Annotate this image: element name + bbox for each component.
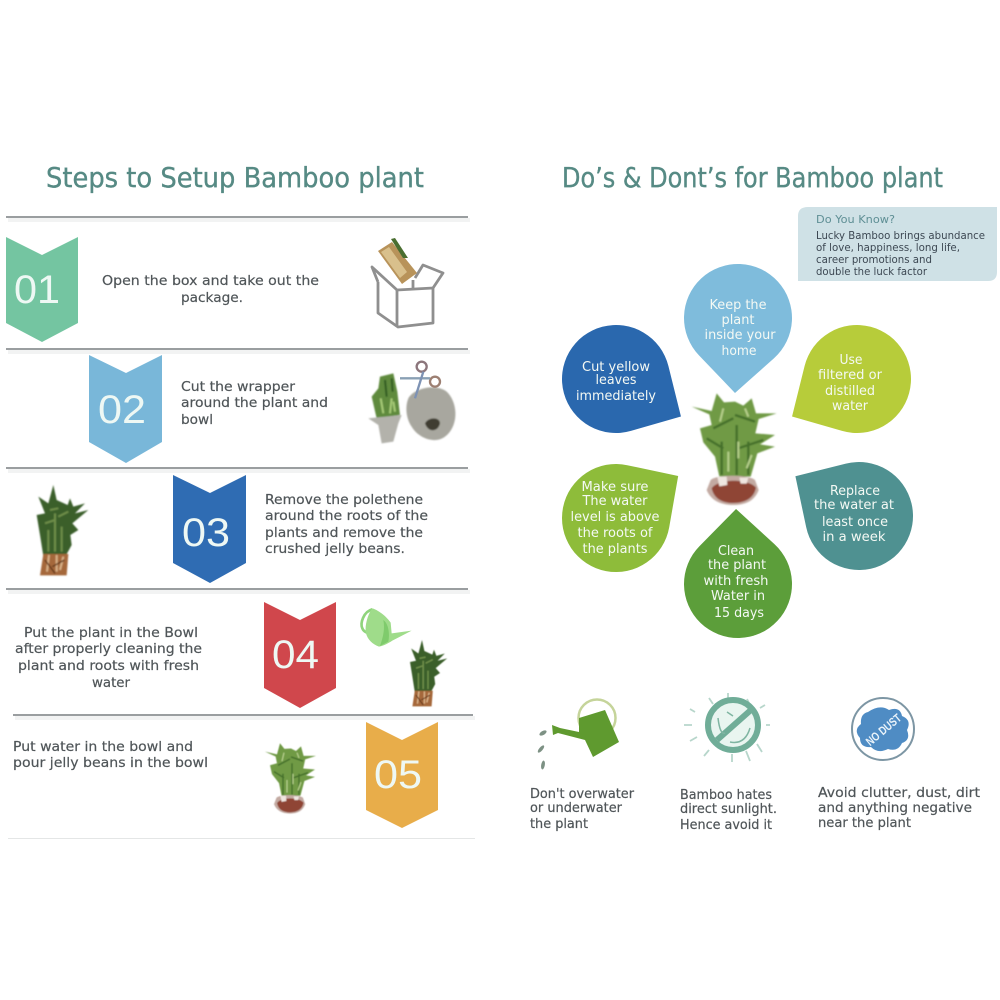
tip text bbox=[680, 788, 777, 833]
step 5 text: Put water in the bowl and bbox=[13, 740, 193, 755]
step 5 bbox=[13, 722, 438, 828]
step 2 badge bbox=[89, 355, 162, 463]
step 1 text: package. bbox=[181, 291, 243, 306]
drop: water level: Make sure bbox=[582, 480, 648, 495]
drop: keep inside: inside your bbox=[704, 328, 776, 343]
step 2 bbox=[89, 355, 455, 463]
step 4 text: plant and roots with fresh bbox=[18, 659, 199, 674]
step 4 text: after properly cleaning the bbox=[15, 642, 202, 657]
drop: clean plant: Clean bbox=[718, 544, 754, 559]
drop: keep inside bbox=[681, 262, 794, 395]
step 3 text: around the roots of the bbox=[265, 509, 428, 524]
drop: filtered water bbox=[765, 305, 931, 463]
callout: do you know: Do You Know? bbox=[816, 213, 895, 226]
drop: replace water: least once bbox=[822, 515, 888, 530]
drop: clean plant: with fresh bbox=[704, 574, 768, 589]
icon: no sun bbox=[684, 693, 770, 762]
drop: replace water: the water at bbox=[814, 498, 894, 513]
tip text bbox=[818, 786, 980, 831]
tip text: the plant bbox=[530, 817, 588, 832]
step 4 text: water bbox=[92, 676, 131, 691]
tip text: Avoid clutter, dust, dirt bbox=[818, 786, 980, 801]
icon: plant in bowl bbox=[265, 743, 316, 814]
tip: dust bbox=[818, 698, 980, 831]
icon: bamboo plant bbox=[37, 485, 88, 575]
tip text: near the plant bbox=[818, 816, 911, 831]
title: steps: Steps to Setup Bamboo plant bbox=[46, 162, 424, 194]
drop: water level: The water bbox=[582, 494, 648, 509]
icon: watering can bbox=[537, 700, 619, 770]
step 3 text bbox=[265, 493, 428, 557]
drop: clean plant: Water in bbox=[711, 589, 765, 604]
icon: no dust: NO DUST bbox=[863, 711, 905, 749]
title: dos and donts: Do’s & Dont’s for Bamboo plant bbox=[562, 162, 943, 194]
tip: watering bbox=[530, 700, 635, 832]
step 5 badge bbox=[366, 722, 438, 828]
drop: keep inside: Keep the bbox=[710, 298, 767, 313]
step 1 bbox=[6, 237, 443, 342]
step 5 text bbox=[13, 740, 208, 771]
step 3 text: crushed jelly beans. bbox=[265, 542, 405, 557]
step 2 text: Cut the wrapper bbox=[181, 380, 296, 395]
drop: filtered water: Use bbox=[840, 353, 862, 368]
callout: do you know: of love, happiness, long life, bbox=[816, 242, 960, 254]
icon: open box bbox=[372, 238, 443, 327]
drop: clean plant bbox=[682, 508, 793, 639]
drop: water level bbox=[541, 431, 708, 593]
drop: replace water: Replace bbox=[830, 484, 880, 499]
step 4 text bbox=[15, 626, 202, 691]
step 3 number: 03 bbox=[182, 511, 230, 555]
drop: clean plant: the plant bbox=[708, 558, 766, 573]
tip text: Don't overwater bbox=[530, 787, 635, 802]
icon: central bamboo plant bbox=[692, 393, 777, 505]
tip text bbox=[530, 787, 635, 832]
drop: keep inside: home bbox=[722, 344, 756, 359]
drop: replace water bbox=[767, 430, 933, 590]
tip text: Hence avoid it bbox=[680, 818, 772, 833]
step 3 badge bbox=[173, 475, 246, 583]
step 3 text: plants and remove the bbox=[265, 526, 423, 541]
drop: keep inside: plant bbox=[722, 313, 754, 328]
drop: cut yellow leaves: leaves bbox=[596, 373, 637, 388]
callout: do you know: Lucky Bamboo brings abundance bbox=[816, 230, 985, 242]
drop: replace water: in a week bbox=[822, 530, 886, 545]
step 1 text: Open the box and take out the bbox=[102, 274, 319, 289]
step 5 text: pour jelly beans in the bowl bbox=[13, 756, 208, 771]
drop: cut yellow leaves: Cut yellow bbox=[582, 360, 650, 375]
step 3 text: Remove the polethene bbox=[265, 493, 423, 508]
step 3 bbox=[37, 475, 428, 583]
drop: cut yellow leaves bbox=[542, 305, 708, 463]
tip text: or underwater bbox=[530, 801, 623, 816]
drop: cut yellow leaves: immediately bbox=[576, 389, 656, 404]
drop: water level: level is above bbox=[570, 510, 660, 525]
step 5 number: 05 bbox=[374, 753, 422, 797]
callout: do you know bbox=[798, 207, 997, 281]
step 1 text bbox=[102, 274, 319, 306]
tip text: direct sunlight. bbox=[680, 802, 777, 817]
step 4 bbox=[15, 602, 447, 708]
drop: filtered water: filtered or bbox=[818, 368, 883, 383]
drop: filtered water: distilled bbox=[825, 384, 875, 399]
step 2 text: bowl bbox=[181, 413, 213, 428]
tip text: Bamboo hates bbox=[680, 788, 772, 803]
step 4 number: 04 bbox=[272, 633, 319, 677]
step 4 badge bbox=[264, 602, 336, 708]
drop: clean plant: 15 days bbox=[714, 606, 764, 621]
step 2 number: 02 bbox=[98, 388, 146, 432]
drop: filtered water: water bbox=[832, 399, 869, 414]
step 1 number: 01 bbox=[14, 268, 60, 312]
callout: do you know: career promotions and bbox=[816, 254, 932, 266]
tip: sunlight bbox=[680, 693, 777, 833]
callout: do you know: double the luck factor bbox=[816, 266, 928, 278]
tip text: and anything negative bbox=[818, 801, 972, 816]
icon: watering can over plant bbox=[362, 608, 447, 706]
drop: water level: the plants bbox=[582, 542, 648, 557]
drop: water level: the roots of bbox=[578, 526, 653, 541]
icon: wrapped plant, bowl and scissors bbox=[368, 362, 455, 443]
step 2 text bbox=[181, 380, 328, 428]
step 2 text: around the plant and bbox=[181, 396, 328, 411]
step 4 text: Put the plant in the Bowl bbox=[24, 626, 198, 641]
icon: no dust bbox=[852, 698, 914, 760]
step 1 badge bbox=[6, 237, 78, 342]
